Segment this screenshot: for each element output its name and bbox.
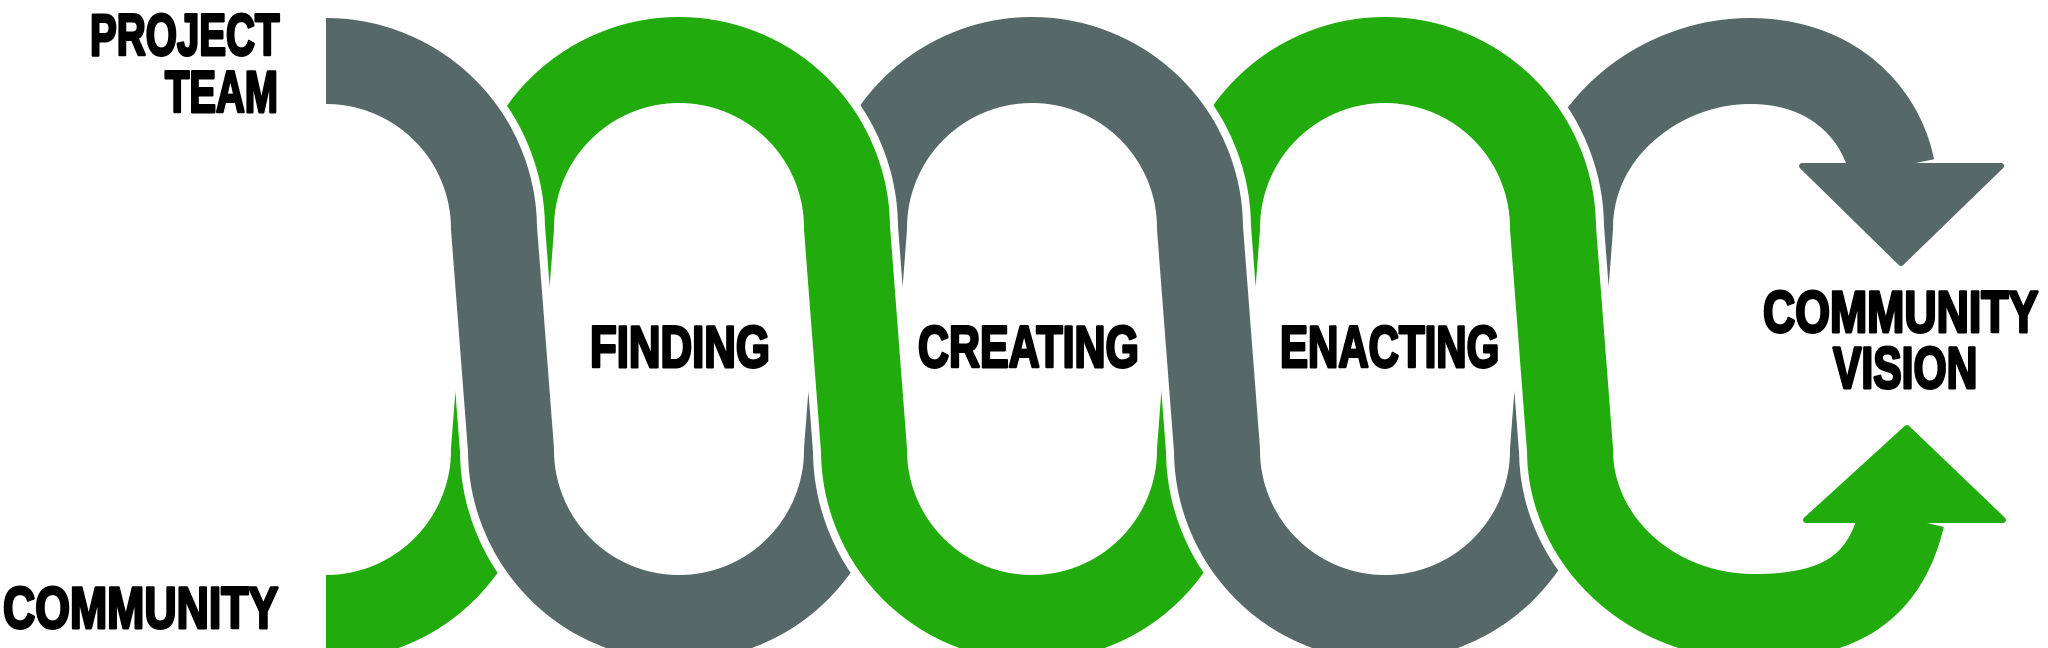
label: community: COMMUNITY	[3, 575, 278, 640]
band: green community base path	[326, 60, 1902, 618]
label: finding: FINDING	[590, 314, 770, 379]
label: enacting: ENACTING	[1280, 314, 1499, 380]
crossing 1: gray over green	[326, 61, 679, 618]
band: gray project team base path	[326, 60, 1892, 618]
crossing 2: green over gray	[679, 60, 1032, 618]
label: project team: TEAM	[165, 60, 278, 125]
label: creating: CREATING	[918, 315, 1139, 380]
label: community vision: COMMUNITY	[1763, 279, 2038, 344]
arrow: gray arrowhead pointing down	[1802, 166, 2001, 263]
label: project team: PROJECT	[90, 3, 280, 68]
label: community vision	[1763, 279, 2038, 401]
label: community vision: VISION	[1833, 336, 1977, 401]
arrow: green arrowhead pointing up	[1806, 428, 2003, 520]
crossing 3: gray over green	[1032, 60, 1385, 618]
crossing 4: green over gray, leading to green arrow	[1385, 60, 1902, 617]
label: project team	[90, 3, 280, 125]
